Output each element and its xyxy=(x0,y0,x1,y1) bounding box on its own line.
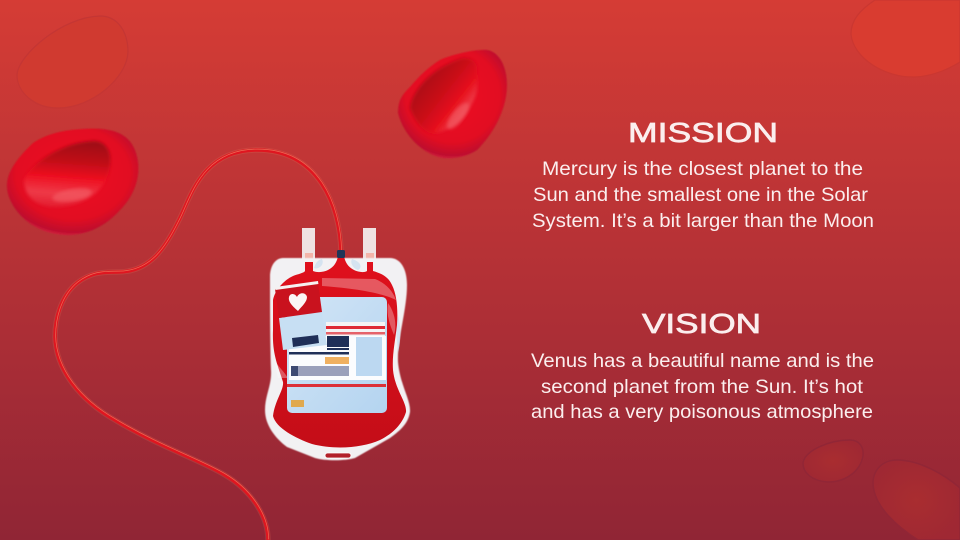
vision block xyxy=(531,308,874,423)
red blood cell: top xyxy=(398,50,507,158)
red band xyxy=(326,322,385,336)
red blood cell: left xyxy=(7,129,138,235)
mission body: System. It’s a bit larger than the Moon xyxy=(532,210,874,232)
white data label xyxy=(289,336,386,380)
vision body: Venus has a beautiful name and is the xyxy=(531,350,874,372)
tilted donor tag xyxy=(275,281,327,350)
heart icon xyxy=(289,293,307,311)
mission body: Sun and the smallest one in the Solar xyxy=(533,184,869,206)
mission body xyxy=(532,158,874,232)
bag pale blue tints xyxy=(314,259,400,352)
mission block xyxy=(532,117,874,232)
mission heading: MISSION xyxy=(628,117,778,148)
bag highlights xyxy=(274,278,396,378)
vision body xyxy=(531,350,874,423)
red stripe xyxy=(287,384,386,387)
mission body: Mercury is the closest planet to the xyxy=(542,158,863,180)
vision heading: VISION xyxy=(642,308,761,339)
faded cell: top right xyxy=(851,0,960,77)
vision body: second planet from the Sun. It’s hot xyxy=(541,376,864,398)
outer plastic bag xyxy=(265,258,410,460)
blood bag xyxy=(265,228,410,460)
orange mark xyxy=(291,400,304,407)
vision body: and has a very poisonous atmosphere xyxy=(531,401,873,423)
blood fill xyxy=(273,256,406,447)
bottom handle slot xyxy=(325,453,351,458)
navy tube connector xyxy=(337,250,345,258)
bag hanger tabs xyxy=(302,228,376,260)
blue info card xyxy=(287,297,387,413)
blood tube xyxy=(55,149,342,540)
faded cell: top left xyxy=(17,16,128,108)
faded cell: bottom small xyxy=(803,440,863,482)
faded cell: bottom large xyxy=(873,460,960,540)
